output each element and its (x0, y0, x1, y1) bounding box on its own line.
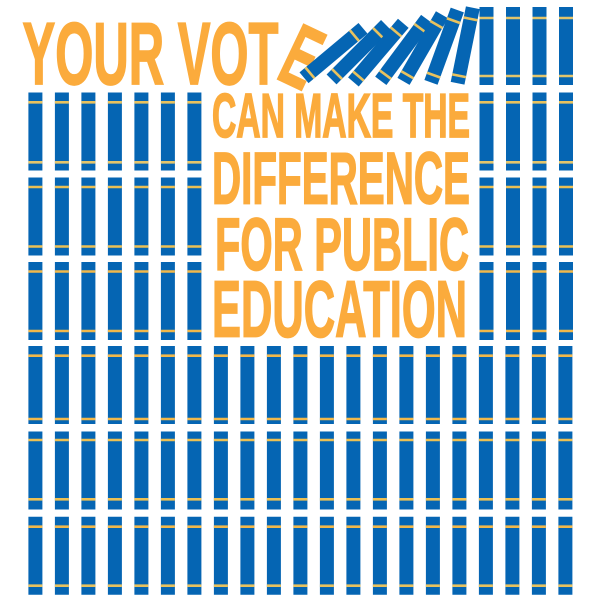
falling book 7 (451, 6, 480, 85)
heading: tilted letter E: E (266, 5, 338, 108)
falling book 4 (375, 15, 432, 85)
falling books row (300, 6, 480, 86)
book row 2 (28, 187, 573, 246)
heading: your vote: YOUR VOT (22, 4, 278, 103)
falling book 3 (348, 19, 409, 86)
book row 1 (28, 102, 573, 162)
book row 5 (28, 440, 573, 499)
book row 3 (28, 272, 573, 331)
book row 0: standing books, top right (480, 18, 573, 76)
falling book 6 (424, 8, 464, 85)
book row 4 (28, 356, 573, 419)
falling book 1 (300, 23, 367, 83)
book row 6 (28, 527, 573, 586)
falling book 2 (327, 20, 391, 84)
falling book 5 (397, 11, 448, 85)
